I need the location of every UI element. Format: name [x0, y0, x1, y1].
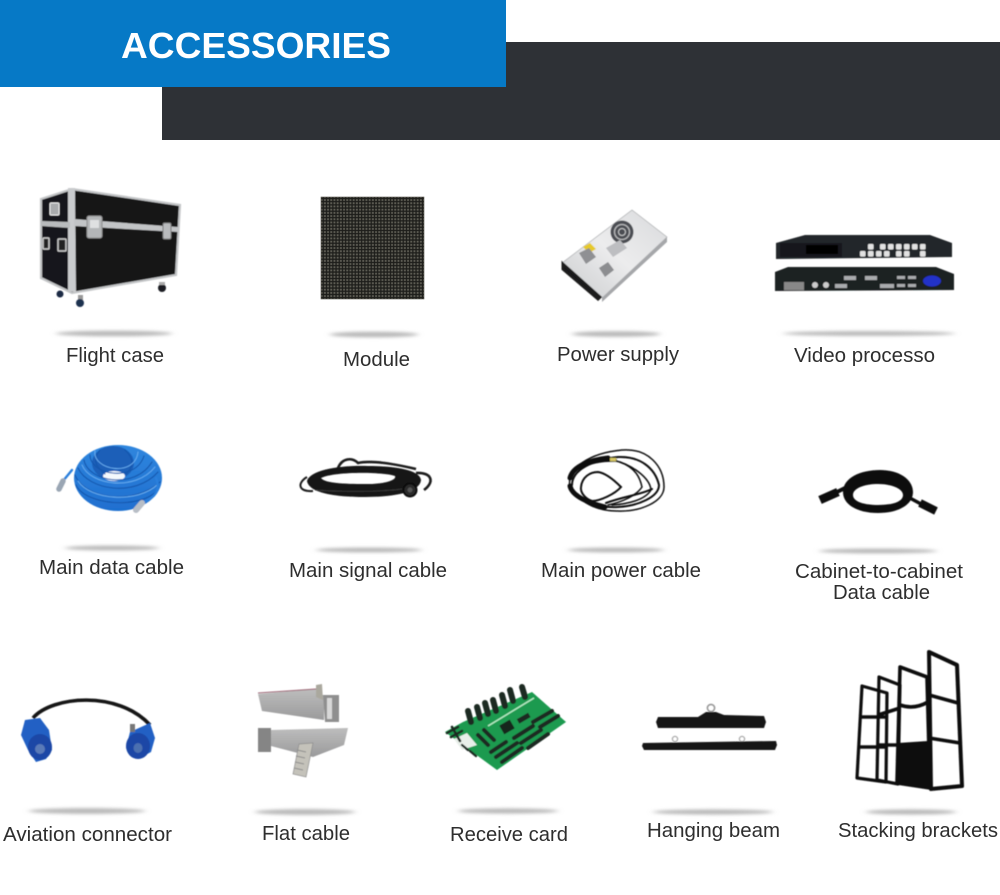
item: stacking brackets: [838, 652, 998, 842]
shadow: [653, 809, 773, 815]
icon: grey ribbon cables: [258, 684, 348, 777]
shadow: [316, 548, 422, 552]
label: Receive card: [450, 824, 568, 846]
title: ACCESSORIES: [121, 25, 391, 66]
item: flight case: [41, 188, 180, 367]
shadow: [866, 809, 956, 815]
shadow: [255, 809, 355, 815]
icon: stacking bracket frames: [857, 652, 962, 789]
shadow: [819, 549, 937, 553]
icon: black power cable: [570, 450, 664, 511]
label: Main data cable: [39, 557, 184, 579]
label: Flat cable: [262, 823, 350, 845]
label: Module: [343, 349, 410, 371]
label: Flight case: [66, 345, 164, 367]
header banner: [0, 0, 1000, 140]
labels: Cabinet-to-cabinet: [795, 561, 963, 583]
shadow: [65, 546, 159, 550]
item: flat cable: [255, 684, 355, 845]
shadow: [458, 808, 558, 814]
labels: [795, 561, 963, 604]
item: main signal cable: [289, 459, 447, 582]
item: cabinet-to-cabinet data cable: [795, 470, 963, 604]
label: Stacking brackets: [838, 820, 998, 842]
icon: video processor: [775, 235, 954, 291]
item: hanging beam: [642, 704, 780, 842]
label: Hanging beam: [647, 820, 780, 842]
item: module: [321, 197, 424, 371]
icon: LED module: [321, 197, 424, 299]
item: main power cable: [541, 450, 701, 582]
shadow: [56, 331, 172, 336]
label: Main signal cable: [289, 560, 447, 582]
icon: aviation connector: [21, 700, 155, 762]
label: Main power cable: [541, 560, 701, 582]
shadow: [572, 331, 660, 337]
icon: black data cable: [820, 470, 936, 513]
shadow: [568, 548, 664, 552]
label: Video processo: [794, 345, 935, 367]
labels: Data cable: [833, 582, 930, 604]
label: Aviation connector: [3, 824, 172, 846]
icon: black signal cable: [300, 459, 431, 497]
item: main data cable: [39, 445, 184, 579]
blue title block: [0, 0, 506, 87]
shadow: [29, 808, 145, 814]
shadow: [330, 332, 418, 337]
dark header bar: [162, 42, 1000, 140]
icon: blue coiled cable: [59, 445, 162, 511]
item: aviation connector: [3, 700, 172, 846]
icon: green receiving card: [445, 687, 566, 770]
icon: hanging beams: [642, 704, 777, 750]
item: power supply: [557, 210, 679, 366]
shadow: [783, 331, 955, 336]
icon: flight case: [41, 188, 180, 307]
item: video processor: [775, 235, 955, 367]
icon: power supply: [562, 210, 667, 302]
item: receive card: [445, 687, 568, 846]
label: Power supply: [557, 344, 679, 366]
